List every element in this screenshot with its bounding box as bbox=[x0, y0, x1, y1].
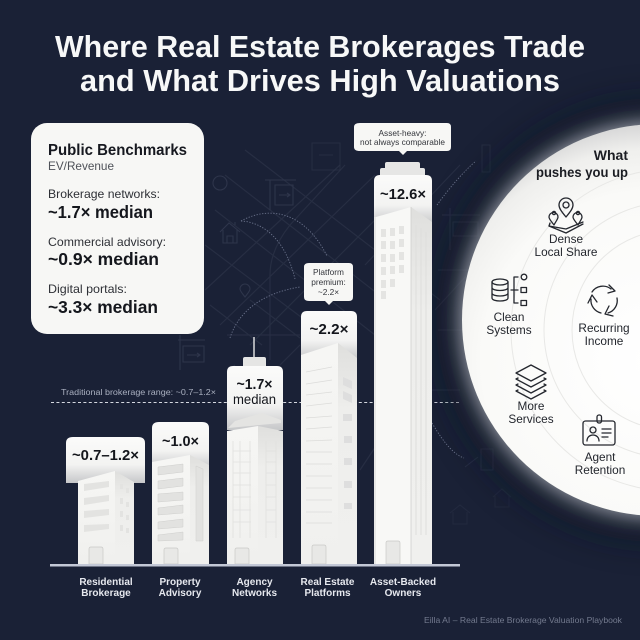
heading: what pushes you up: pushes you up bbox=[536, 164, 628, 180]
driver: dense local share: Local Share bbox=[535, 245, 598, 259]
building: agency networks bbox=[227, 337, 283, 564]
icon: faint location pin bbox=[213, 176, 250, 297]
rooftop steps bbox=[380, 162, 425, 176]
icon: faint for-sale sign lower bbox=[178, 335, 205, 370]
benchmark: brokerage networks bbox=[48, 187, 160, 222]
heading: public benchmarks: Public Benchmarks bbox=[48, 142, 187, 159]
building: residential brokerage bbox=[66, 437, 145, 564]
benchmark: brokerage networks: Brokerage networks: bbox=[48, 187, 160, 201]
icon: faint house bbox=[220, 222, 240, 243]
icon: faint for-sale sign top bbox=[265, 180, 296, 210]
callout: platform premium: premium: bbox=[311, 277, 346, 287]
benchmark: commercial advisory: Commercial advisory: bbox=[48, 235, 166, 249]
category labels bbox=[79, 577, 436, 599]
icon: faint key and door bbox=[465, 449, 493, 470]
title: and What Drives High Valuations bbox=[80, 64, 560, 98]
callout: asset-heavy: Asset-heavy: bbox=[379, 128, 426, 138]
subheading: EV/Revenue: EV/Revenue bbox=[48, 159, 114, 173]
driver: recurring income: Recurring bbox=[578, 321, 630, 335]
driver: dense local share: Dense bbox=[549, 232, 583, 246]
building: property advisory bbox=[152, 422, 209, 564]
icon: database with outputs bbox=[492, 274, 527, 306]
value label: ~1.7× bbox=[236, 376, 273, 393]
label: real estate platforms: Platforms bbox=[304, 588, 351, 599]
label: property advisory: Property bbox=[159, 577, 201, 588]
value label bbox=[152, 422, 209, 470]
panel: public benchmarks bbox=[31, 123, 204, 334]
driver: clean systems bbox=[486, 274, 532, 337]
title bbox=[55, 30, 585, 98]
label: residential brokerage: Brokerage bbox=[81, 588, 131, 599]
value label: median bbox=[233, 392, 276, 407]
driver: dense local share bbox=[535, 198, 598, 259]
label: agency networks: Networks bbox=[232, 588, 277, 599]
footer credit: Eilla AI – Real Estate Brokerage Valuation Playbook bbox=[424, 615, 623, 625]
benchmark: commercial advisory: ~0.9× median bbox=[48, 249, 159, 269]
icon: id badge bbox=[583, 415, 615, 445]
building: real estate platforms bbox=[301, 311, 357, 564]
driver: agent retention: Agent bbox=[585, 450, 616, 464]
icon: faint board top bbox=[312, 143, 490, 172]
reference line: traditional brokerage range: Traditional brokerage range: ~0.7–1.2× bbox=[61, 387, 216, 397]
antenna bbox=[253, 337, 255, 358]
rooftop cap bbox=[243, 357, 266, 366]
icon: recurring arrows bbox=[588, 285, 617, 316]
driver: clean systems: Systems bbox=[486, 323, 532, 337]
label: asset-backed owners: Owners bbox=[385, 588, 422, 599]
callout: platform premium bbox=[304, 263, 353, 305]
value label: ~0.7–1.2× bbox=[72, 447, 139, 464]
label: real estate platforms bbox=[301, 577, 355, 599]
baseline axis bbox=[50, 564, 460, 566]
benchmark: digital portals bbox=[48, 282, 158, 317]
label: agency networks: Agency bbox=[236, 577, 273, 588]
driver: clean systems: Clean bbox=[494, 310, 524, 324]
callout: asset-heavy: not always comparable bbox=[360, 137, 445, 147]
label: agency networks bbox=[232, 577, 277, 599]
heading: what pushes you up bbox=[536, 147, 628, 180]
label: asset-backed owners: Asset-Backed bbox=[370, 577, 436, 588]
value label: ~12.6× bbox=[380, 186, 426, 203]
label: residential brokerage: Residential bbox=[79, 577, 133, 588]
value label: ~2.2× bbox=[310, 321, 349, 338]
benchmark: brokerage networks: ~1.7× median bbox=[48, 202, 153, 222]
driver: more services bbox=[508, 365, 554, 426]
driver: agent retention bbox=[575, 415, 625, 477]
callout: platform premium: Platform bbox=[313, 267, 344, 277]
heading: what pushes you up: What bbox=[594, 147, 628, 163]
driver: recurring income bbox=[578, 285, 630, 348]
driver: agent retention: Retention bbox=[575, 463, 625, 477]
benchmark: digital portals: ~3.3× median bbox=[48, 297, 158, 317]
driver: recurring income: Income bbox=[585, 334, 624, 348]
icon: faint houses low bbox=[450, 489, 511, 524]
benchmark: commercial advisory bbox=[48, 235, 166, 269]
callout: platform premium: ~2.2× bbox=[318, 287, 339, 297]
label: residential brokerage bbox=[79, 577, 133, 599]
label: property advisory: Advisory bbox=[159, 588, 202, 599]
benchmark: digital portals: Digital portals: bbox=[48, 282, 127, 296]
title: Where Real Estate Brokerages Trade bbox=[55, 30, 585, 64]
value label: ~1.0× bbox=[162, 433, 199, 450]
driver: more services: More bbox=[518, 399, 545, 413]
icon: faint sign at right bbox=[442, 208, 480, 250]
label: property advisory bbox=[159, 577, 202, 599]
driver disc bbox=[436, 98, 640, 542]
value label bbox=[233, 376, 276, 407]
label: real estate platforms: Real Estate bbox=[301, 577, 355, 588]
label: asset-backed owners bbox=[370, 577, 436, 599]
callout: asset-heavy bbox=[354, 123, 451, 155]
driver: more services: Services bbox=[508, 412, 554, 426]
background street map bbox=[205, 150, 490, 470]
background real estate icons bbox=[178, 143, 511, 524]
dotted arrows bbox=[230, 161, 476, 458]
icon: map pins bbox=[549, 198, 583, 233]
icon: stacked layers bbox=[516, 365, 546, 399]
building: asset-backed owners bbox=[374, 162, 432, 564]
